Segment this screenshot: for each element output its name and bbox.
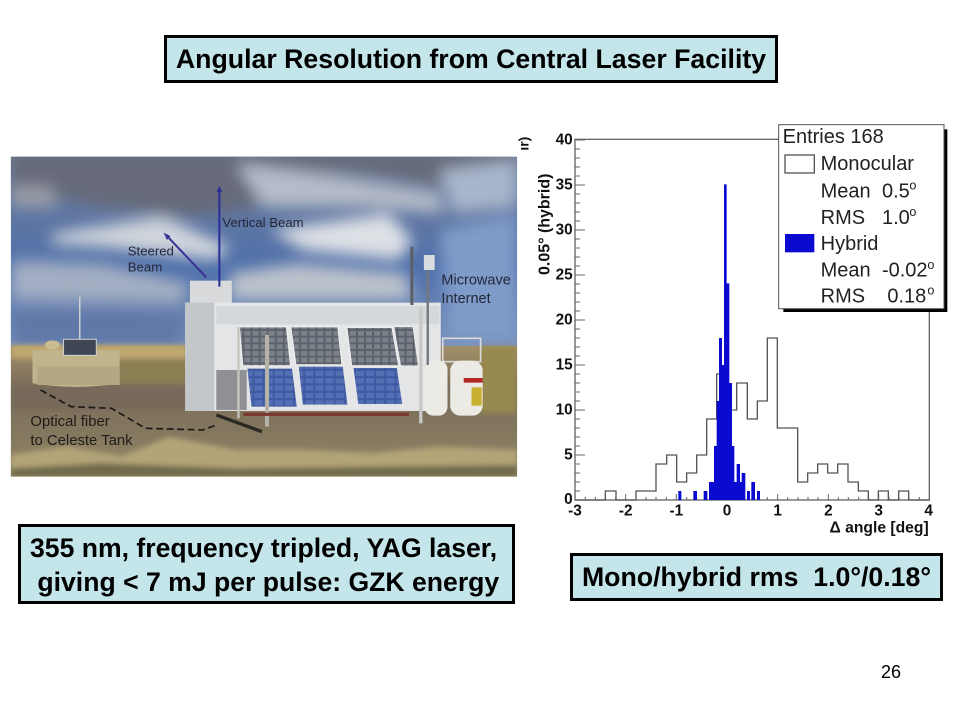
hybrid histogram	[678, 184, 760, 500]
x axis numbers: -2	[619, 503, 632, 520]
legend: Hybrid	[821, 233, 878, 255]
legend: -0.02	[882, 260, 928, 282]
y axis numbers: 0	[564, 491, 573, 508]
clouds	[11, 150, 517, 347]
photo labels: Steered	[128, 244, 174, 259]
x axis numbers: 3	[874, 503, 883, 520]
y axis numbers: 10	[556, 402, 573, 419]
tank	[32, 350, 120, 387]
x axis numbers	[568, 503, 933, 520]
legend: Mean	[821, 180, 871, 202]
x axis numbers: 0	[723, 503, 731, 520]
photo labels: Optical fiber	[30, 414, 110, 430]
histogram chart	[516, 125, 947, 537]
x axis numbers: -3	[568, 503, 582, 520]
legend: o	[909, 205, 916, 219]
x axis numbers: 1	[773, 503, 782, 520]
solar panels lower	[247, 369, 297, 407]
photo: laser facility	[11, 150, 517, 477]
y axis numbers: 20	[556, 312, 573, 329]
resolution callout box	[570, 553, 943, 601]
y axis numbers: 15	[556, 357, 573, 374]
y axis numbers: 25	[556, 267, 573, 284]
ground	[11, 346, 517, 477]
x axis title: Δ angle [deg]	[830, 520, 929, 537]
monocular histogram	[575, 338, 929, 500]
legend: RMS	[821, 285, 865, 307]
legend	[779, 125, 947, 312]
y axis numbers	[556, 132, 573, 508]
y axis numbers: 30	[556, 222, 573, 239]
legend: o	[927, 284, 934, 298]
legend: Mean	[821, 260, 871, 282]
masts	[410, 247, 413, 305]
clipped axis fragment: ır)	[516, 137, 532, 151]
legend: Entries 168	[783, 126, 884, 148]
steered beam arrow	[164, 233, 206, 277]
resolution callout box: Mono/hybrid rms 1.0°/0.18°	[582, 562, 931, 592]
x axis numbers: 4	[924, 503, 933, 520]
legend: 0.5	[882, 180, 910, 202]
title	[164, 35, 778, 83]
axes frame	[575, 139, 929, 500]
x axis numbers: -1	[670, 503, 684, 520]
solar panels upper	[239, 327, 291, 366]
legend: 0.18	[887, 285, 926, 307]
legend: o	[909, 178, 916, 192]
photo labels: Vertical Beam	[222, 215, 304, 230]
photo labels	[30, 215, 511, 449]
slide number: 26	[881, 662, 901, 682]
x axis numbers: 2	[824, 503, 833, 520]
title: Angular Resolution from Central Laser Facility	[176, 44, 766, 74]
laser description box: 355 nm, frequency tripled, YAG laser, giving < 7 mJ per pulse: GZK energy	[30, 533, 499, 597]
y axis title: 0.05° (hybrid)	[536, 174, 553, 275]
photo labels: Beam	[128, 260, 162, 275]
photo labels: Microwave	[441, 273, 511, 289]
legend: o	[927, 258, 934, 272]
y axis numbers: 40	[556, 132, 573, 149]
propane tanks	[443, 338, 481, 362]
legend: RMS	[821, 207, 865, 229]
y axis numbers: 5	[564, 447, 573, 464]
tick marks	[575, 140, 919, 500]
legend: Monocular	[821, 153, 914, 175]
container	[190, 280, 232, 303]
vertical beam arrow	[217, 186, 222, 287]
y axis numbers: 35	[556, 177, 573, 194]
legend: 1.0	[882, 207, 910, 229]
photo labels: Internet	[441, 291, 491, 307]
photo labels: to Celeste Tank	[30, 433, 133, 449]
